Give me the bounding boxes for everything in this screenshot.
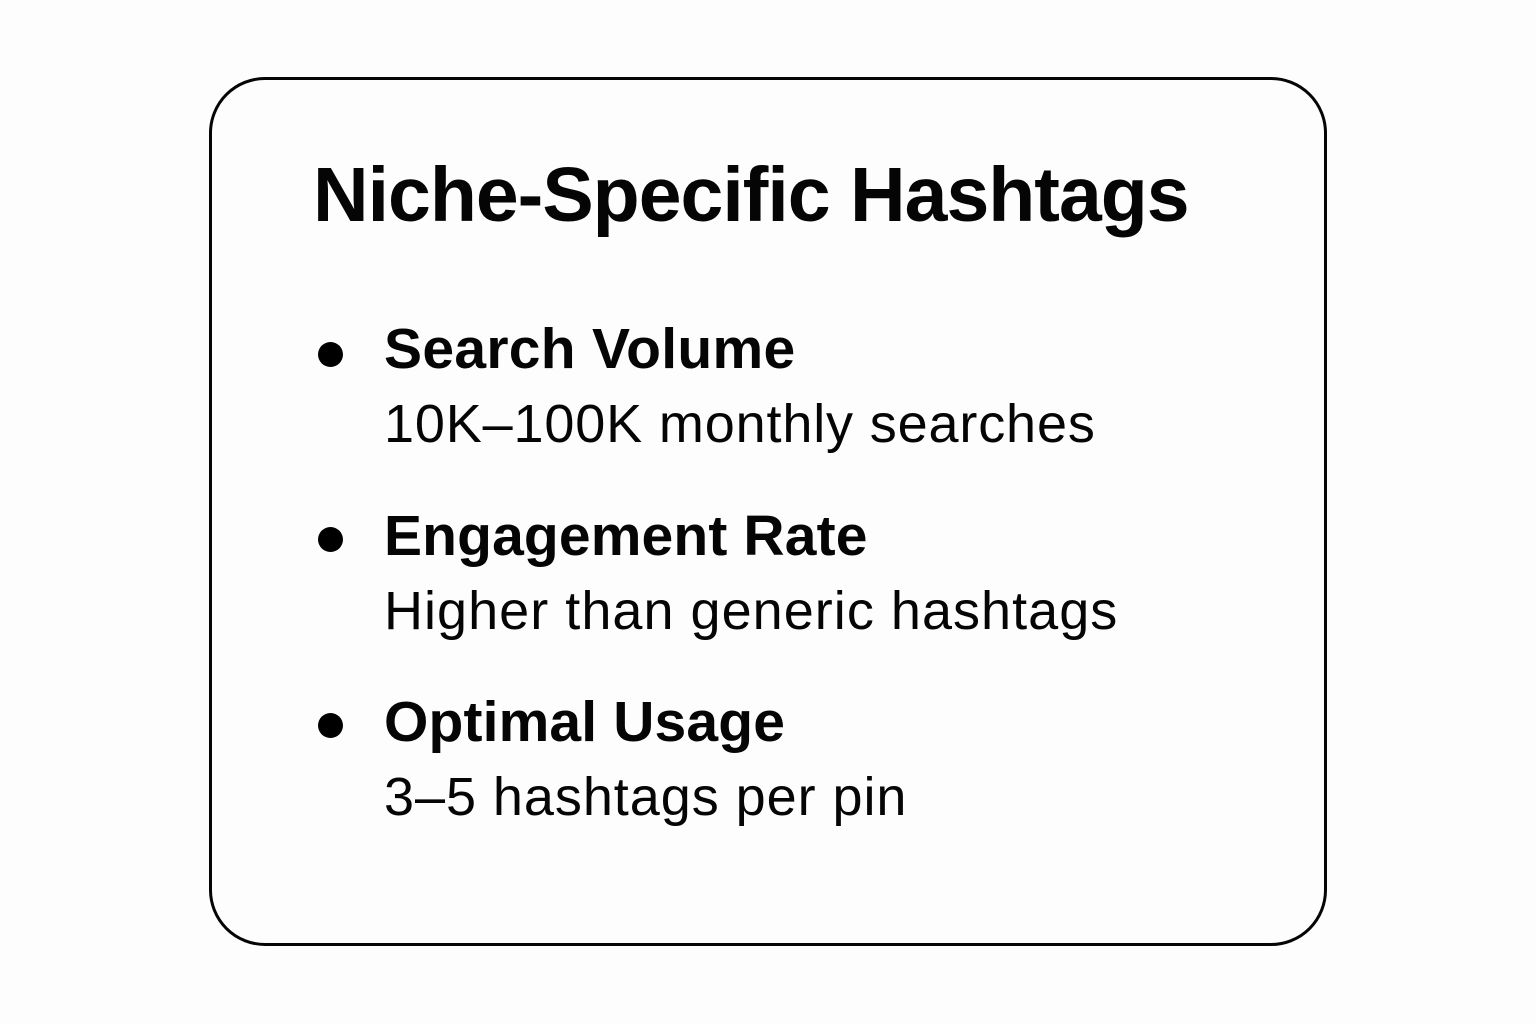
title: Niche-Specific Hashtags [313,152,1189,238]
panel: card [209,77,1327,946]
bullet icon: optimal usage [318,713,343,738]
bullet icon: engagement rate [318,527,343,552]
text: search volume detail: 10K–100K monthly searches [384,394,1096,454]
text: engagement rate detail: Higher than generic hashtags [384,581,1118,641]
heading: search volume: Search Volume [384,317,796,381]
heading: optimal usage: Optimal Usage [384,690,785,754]
text: optimal usage detail: 3–5 hashtags per pin [384,767,907,827]
heading: engagement rate: Engagement Rate [384,504,868,568]
bullet icon: search volume [318,342,343,367]
